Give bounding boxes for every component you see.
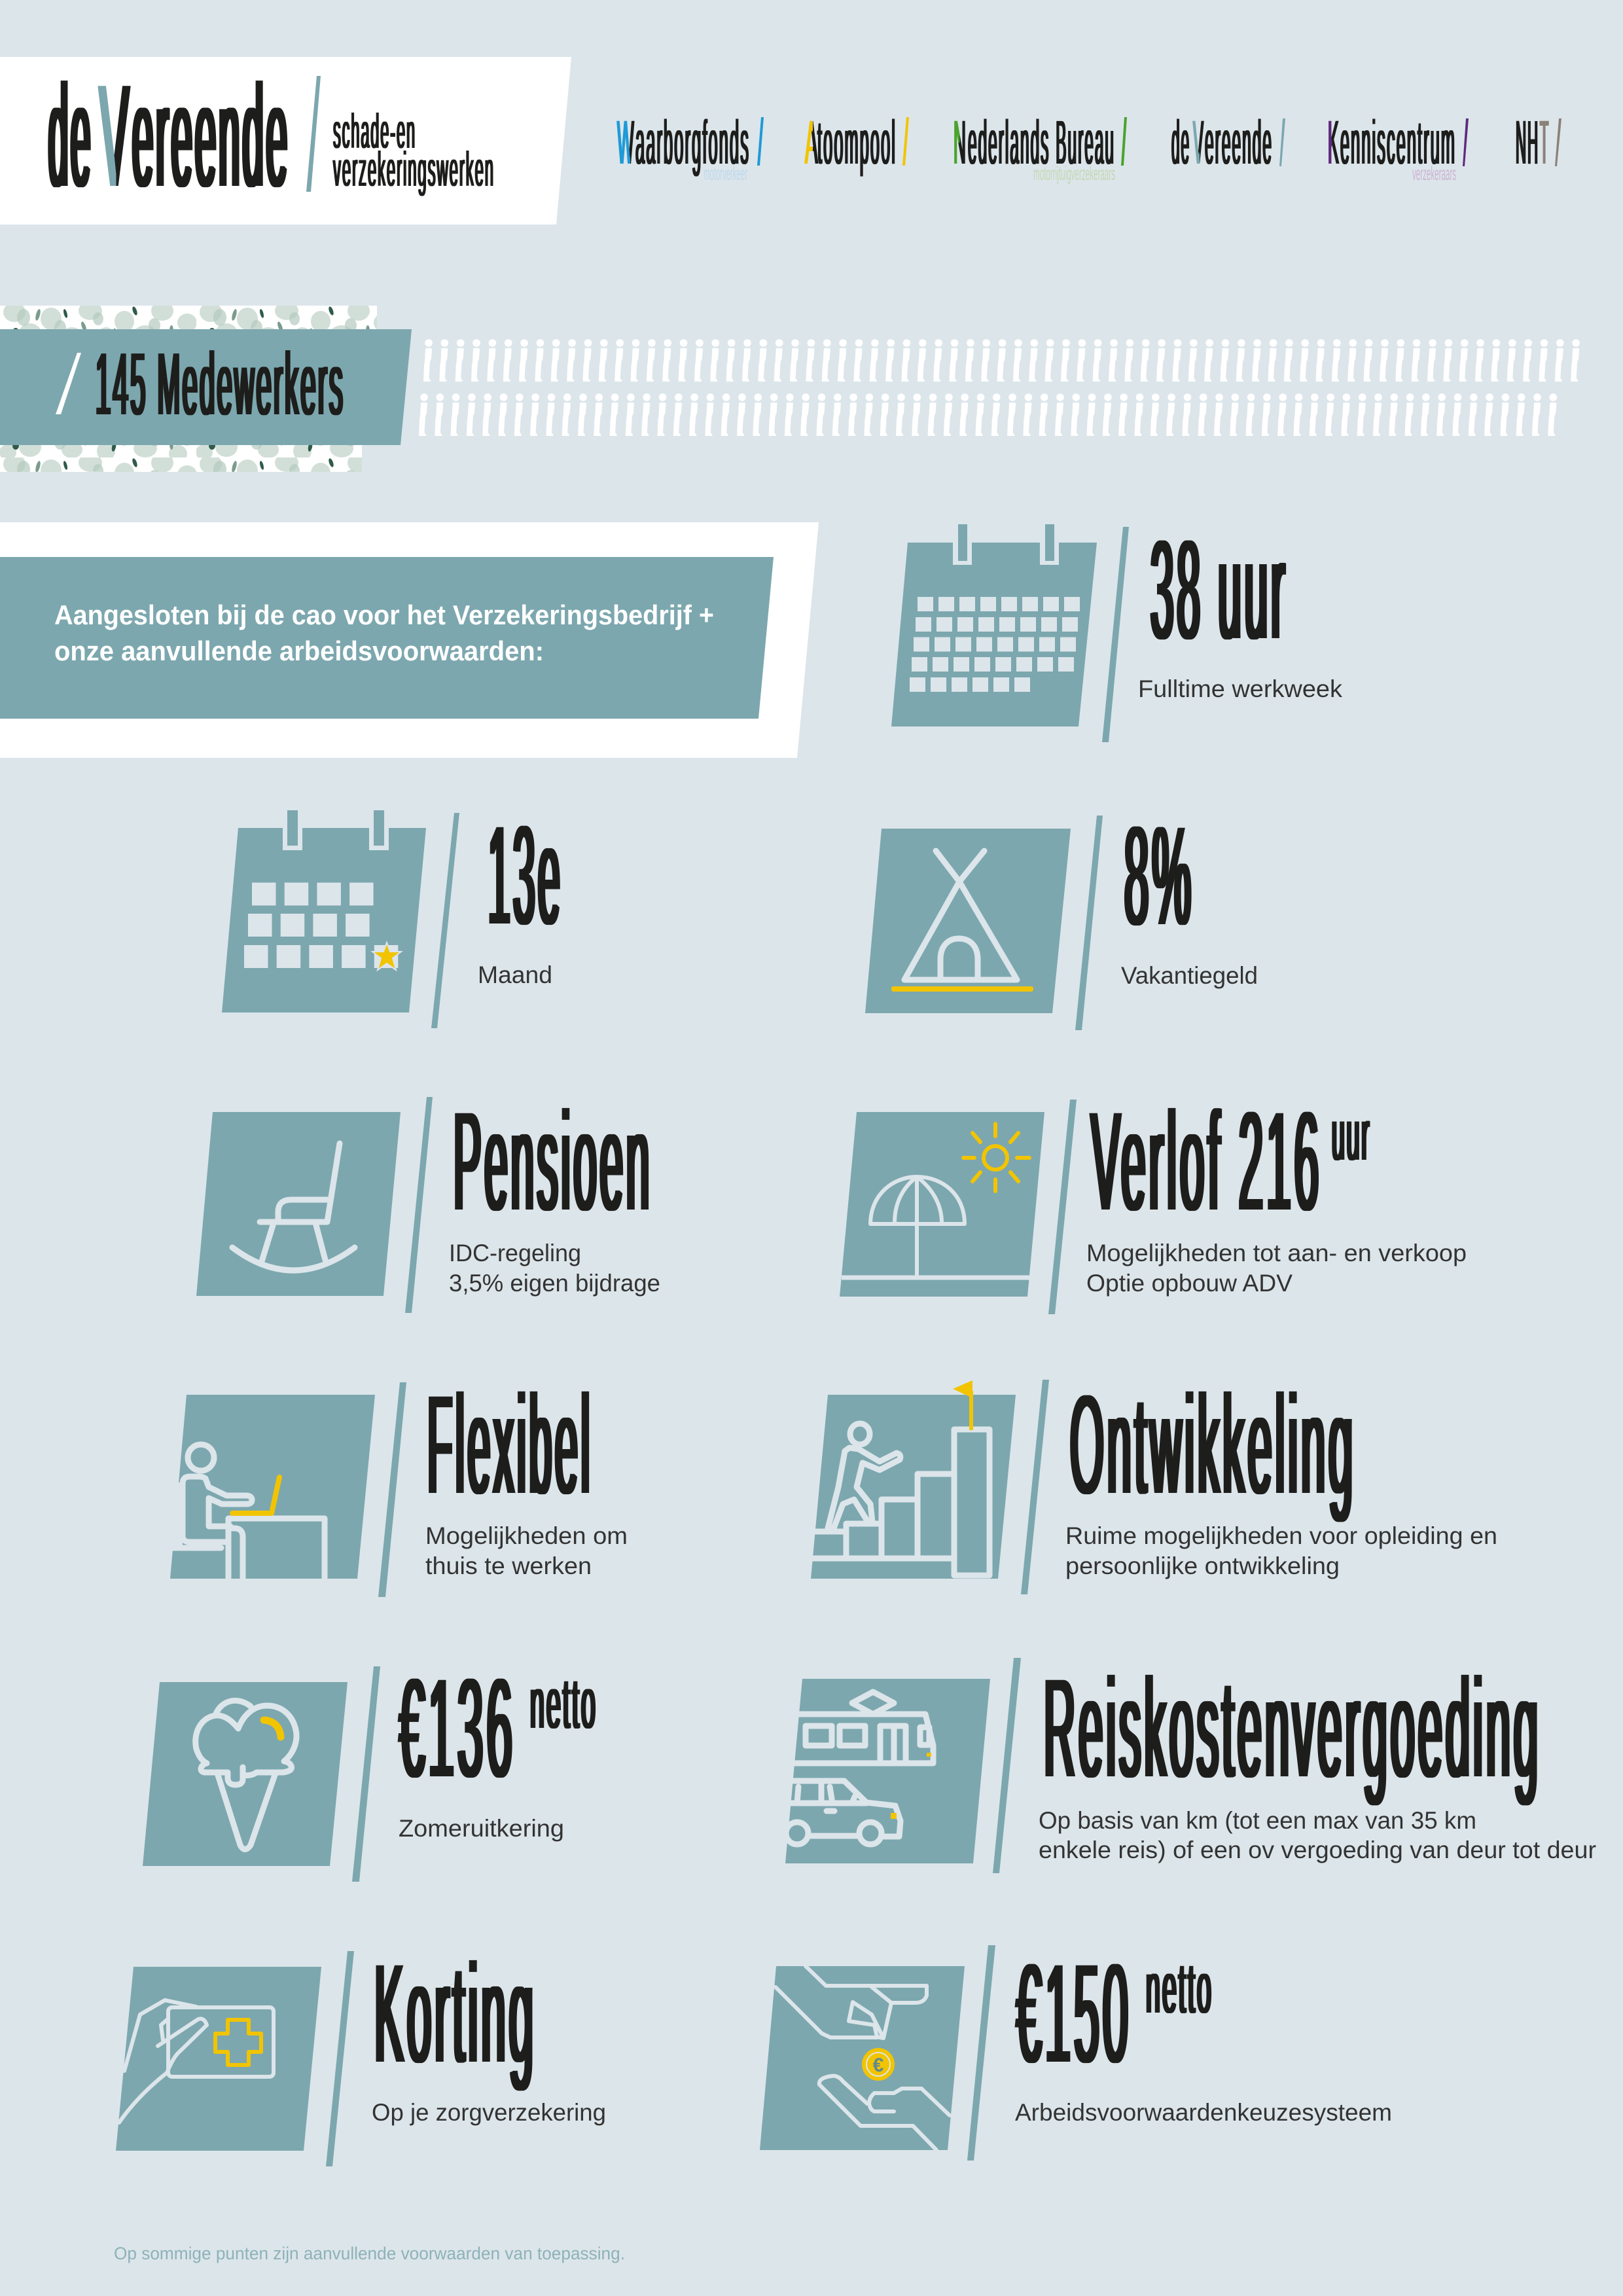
callout: cao (0, 522, 819, 758)
logo: NHT (1516, 108, 1561, 177)
icon: parasol and sun (840, 1112, 1044, 1297)
icon: calendar (891, 524, 1097, 726)
infographic canvas: motorrijtuigverzekeraars (1033, 163, 1115, 185)
callout text: Aangesloten bij de cao voor het Verzekeringsbedrijf + (54, 600, 714, 630)
divider slash (1102, 527, 1129, 742)
logo: de Vereende: V (1193, 108, 1205, 177)
texture strip top (0, 306, 377, 329)
divider slash (405, 1097, 433, 1313)
description: Fulltime werkweek (1138, 675, 1343, 702)
infographic canvas: verzekeringswerken (333, 142, 495, 196)
infographic canvas: ereende (1205, 108, 1273, 177)
divider slash (1021, 1380, 1049, 1594)
divider slash (431, 813, 459, 1028)
description: Vakantiegeld (1121, 962, 1258, 989)
icon: tram and car (785, 1679, 990, 1863)
benefit: Zomeruitkering (143, 1650, 597, 1882)
description: Mogelijkheden tot aan- en verkoop (1086, 1240, 1467, 1266)
texture strip bottom (0, 445, 362, 472)
logo wordmark de Vereende: V (99, 55, 129, 217)
logo: Waarborgfonds: motorverkeer (704, 163, 747, 185)
divider slash (967, 1945, 995, 2161)
logo: Kenniscentrum (1328, 108, 1469, 185)
description: Mogelijkheden om (425, 1522, 628, 1549)
divider slash (993, 1658, 1021, 1873)
logo: Kenniscentrum: K (1328, 108, 1340, 177)
benefit: 13e maand (222, 797, 563, 1028)
infographic canvas: NH (1516, 108, 1539, 177)
icon: person climbing stairs (811, 1380, 1016, 1579)
people row 1 (422, 339, 1582, 382)
icon: ice cream (143, 1682, 348, 1866)
benefit: Reiskostenvergoeding (785, 1650, 1596, 1873)
description: Op basis van km (tot een max van 35 km (1039, 1807, 1476, 1834)
staff banner (0, 306, 412, 472)
description (425, 1522, 628, 1579)
benefit: Arbeidsvoorwaardenkeuzesysteem: €150 (1016, 1935, 1132, 2092)
callout text: onze aanvullende arbeidsvoorwaarden: (54, 636, 544, 666)
benefit: Arbeidsvoorwaardenkeuzesysteem (760, 1935, 1392, 2161)
benefit: Korting (116, 1935, 606, 2166)
benefit: 8% vakantiegeld: 8% (1124, 798, 1194, 954)
infographic canvas: verzekeraars (1412, 163, 1456, 185)
description: Op je zorgverzekering (372, 2099, 606, 2126)
header logo panel: ereende (132, 55, 290, 217)
logo: Nederlands Bureau: N (954, 108, 967, 177)
icon: hands and coin: € (873, 2054, 884, 2076)
benefit: Flexibel (170, 1367, 628, 1597)
description: thuis te werken (425, 1552, 592, 1579)
benefit: Zomeruitkering: €136 (399, 1650, 516, 1806)
header logo panel (0, 55, 571, 224)
icon: hand with insurance card (116, 1967, 321, 2151)
infographic canvas: 145 Medewerkers (96, 334, 345, 433)
benefit: Verlof: uur (1332, 1095, 1371, 1175)
infographic canvas: netto (530, 1663, 597, 1744)
logo tagline: schade-en (333, 104, 416, 158)
callout inner panel (0, 557, 774, 719)
infographic canvas: ederlands Bureau (968, 108, 1115, 177)
logo slash (306, 76, 321, 192)
icon: rocking chair (196, 1112, 401, 1296)
benefit: Arbeidsvoorwaardenkeuzesysteem: netto (1146, 1948, 1213, 2028)
description: Maand (478, 961, 552, 988)
benefit: 8% vakantiegeld (865, 798, 1258, 1030)
infographic canvas: 13e (488, 797, 563, 954)
description (1086, 1240, 1467, 1297)
divider slash (352, 1666, 380, 1882)
description (1065, 1522, 1497, 1579)
logo: Waarborgfonds (617, 108, 764, 185)
infographic canvas: T (1540, 108, 1550, 177)
infographic canvas: Flexibel (427, 1367, 593, 1523)
benefit: Pensioen (196, 1083, 660, 1313)
footnote: Op sommige punten zijn aanvullende voorwaarden van toepassing. (114, 2244, 625, 2263)
infographic canvas: aarborgfonds (635, 108, 750, 177)
icon: person at laptop (170, 1395, 375, 1579)
divider slash (378, 1382, 406, 1597)
logo tagline (333, 104, 495, 196)
infographic canvas: toompool (817, 108, 897, 177)
description (1039, 1807, 1596, 1863)
icon: tent (865, 829, 1071, 1013)
people row 2 (418, 393, 1561, 437)
divider slash (326, 1951, 354, 2166)
description: enkele reis) of een ov vergoeding van deur tot deur (1039, 1837, 1596, 1863)
description: Ruime mogelijkheden voor opleiding en (1065, 1522, 1497, 1549)
banner slash (56, 353, 81, 414)
infographic canvas: Korting (374, 1935, 537, 2092)
icon: calendar with star (222, 810, 426, 1013)
icon: hands and coin (760, 1966, 965, 2150)
description: 3,5% eigen bijdrage (449, 1270, 660, 1297)
divider slash (1075, 816, 1103, 1030)
logo: de Vereende (1171, 108, 1285, 177)
logo: Waarborgfonds: W (617, 108, 635, 177)
benefit: 38 uur (891, 512, 1343, 742)
logo: Nederlands Bureau (954, 108, 1127, 185)
divider slash (1048, 1100, 1077, 1314)
logo: Atoompool: A (805, 108, 819, 177)
description: Zomeruitkering (399, 1815, 564, 1842)
description: Optie opbouw ADV (1086, 1270, 1293, 1297)
logo wordmark de Vereende: de (48, 55, 93, 217)
description (449, 1240, 660, 1297)
logo: de Vereende: de (1171, 108, 1190, 177)
infographic canvas: Pensioen (454, 1083, 652, 1240)
infographic canvas: 38 uur (1150, 512, 1288, 668)
description: Arbeidsvoorwaardenkeuzesysteem (1015, 2099, 1392, 2126)
callout text (54, 600, 714, 666)
logo: Atoompool (805, 108, 909, 177)
benefit: Verlof (840, 1083, 1467, 1314)
benefit: Ontwikkeling (811, 1367, 1497, 1594)
description: IDC-regeling (449, 1240, 581, 1266)
description: persoonlijke ontwikkeling (1065, 1552, 1340, 1579)
banner shape (0, 329, 412, 445)
